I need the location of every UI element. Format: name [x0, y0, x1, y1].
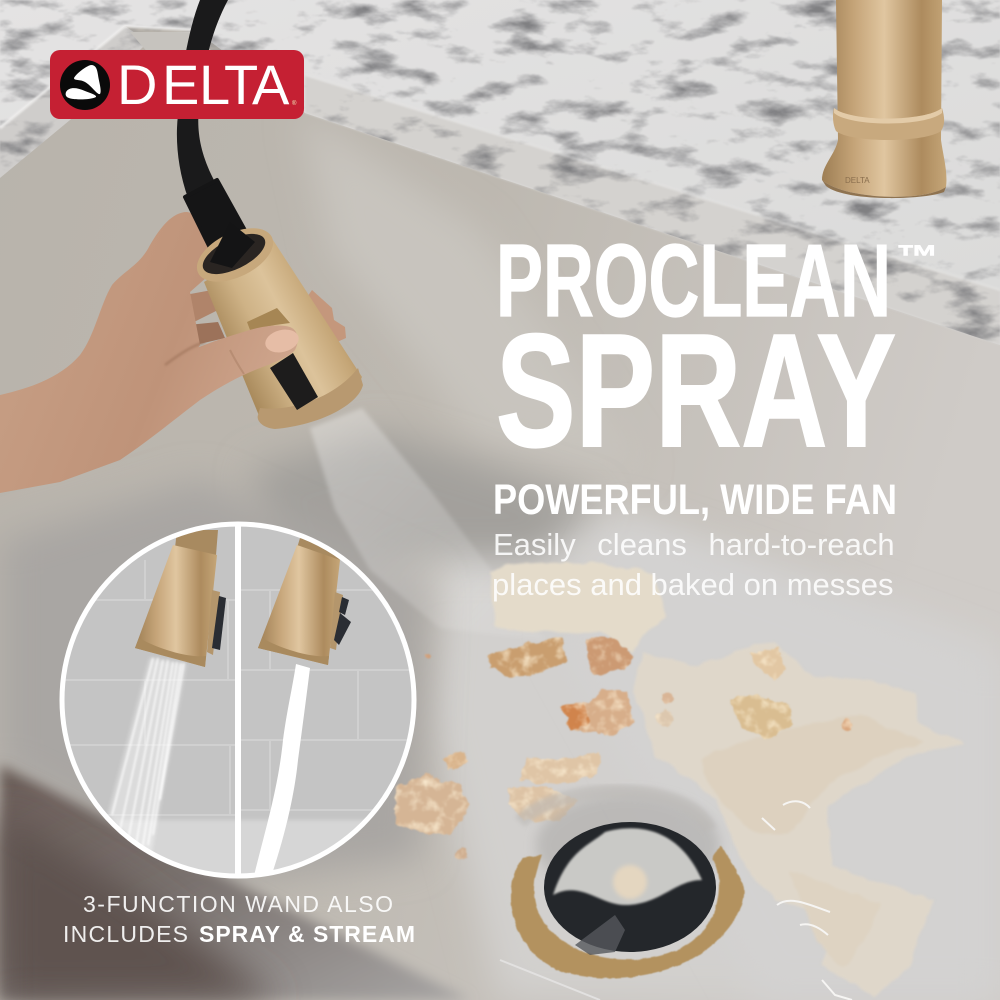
title — [496, 223, 939, 481]
spray fan from wand — [310, 408, 545, 640]
title: ™ — [896, 238, 939, 275]
inset caption: INCLUDES — [63, 921, 188, 947]
Delta logo badge — [50, 50, 304, 119]
spray stream — [108, 658, 186, 860]
black braided hose — [177, 0, 252, 262]
icon: delta triangle mark — [60, 60, 110, 110]
food stains — [490, 563, 965, 997]
left head: spray mode — [135, 530, 226, 667]
food crumbs — [395, 636, 854, 860]
brass flange — [511, 846, 744, 978]
subheading and description: Easily cleans hard-to-reach — [493, 527, 895, 562]
solid white stream — [253, 664, 310, 880]
wordmark: DELTA — [117, 53, 290, 116]
subheading and description — [492, 476, 897, 602]
inset circle: spray and stream comparison — [62, 524, 414, 880]
Delta logo badge: ® — [292, 100, 297, 107]
thumbnail — [263, 326, 301, 356]
marble countertop — [0, 0, 1000, 345]
drain with brass ring — [511, 791, 744, 978]
right head: stream mode — [258, 538, 351, 665]
hose connector — [185, 180, 252, 262]
water swirl — [553, 828, 702, 905]
inset caption: 3-FUNCTION WAND ALSO — [83, 891, 393, 917]
faucet base: DELTA — [845, 176, 870, 185]
spray wand head — [189, 217, 363, 429]
inset caption: SPRAY & STREAM — [199, 921, 415, 947]
hand thumb — [60, 326, 301, 482]
subheading and description: places and baked on messes — [492, 567, 894, 602]
inset caption — [63, 891, 415, 947]
water and highlights on sink floor — [762, 801, 852, 1000]
faucet base — [822, 0, 946, 198]
subheading and description: POWERFUL, WIDE FAN — [493, 476, 897, 524]
wand trigger button — [270, 353, 318, 410]
hand fingers behind wand — [185, 290, 346, 345]
hand palm — [0, 212, 215, 493]
sink lower edge highlight — [500, 960, 600, 1000]
